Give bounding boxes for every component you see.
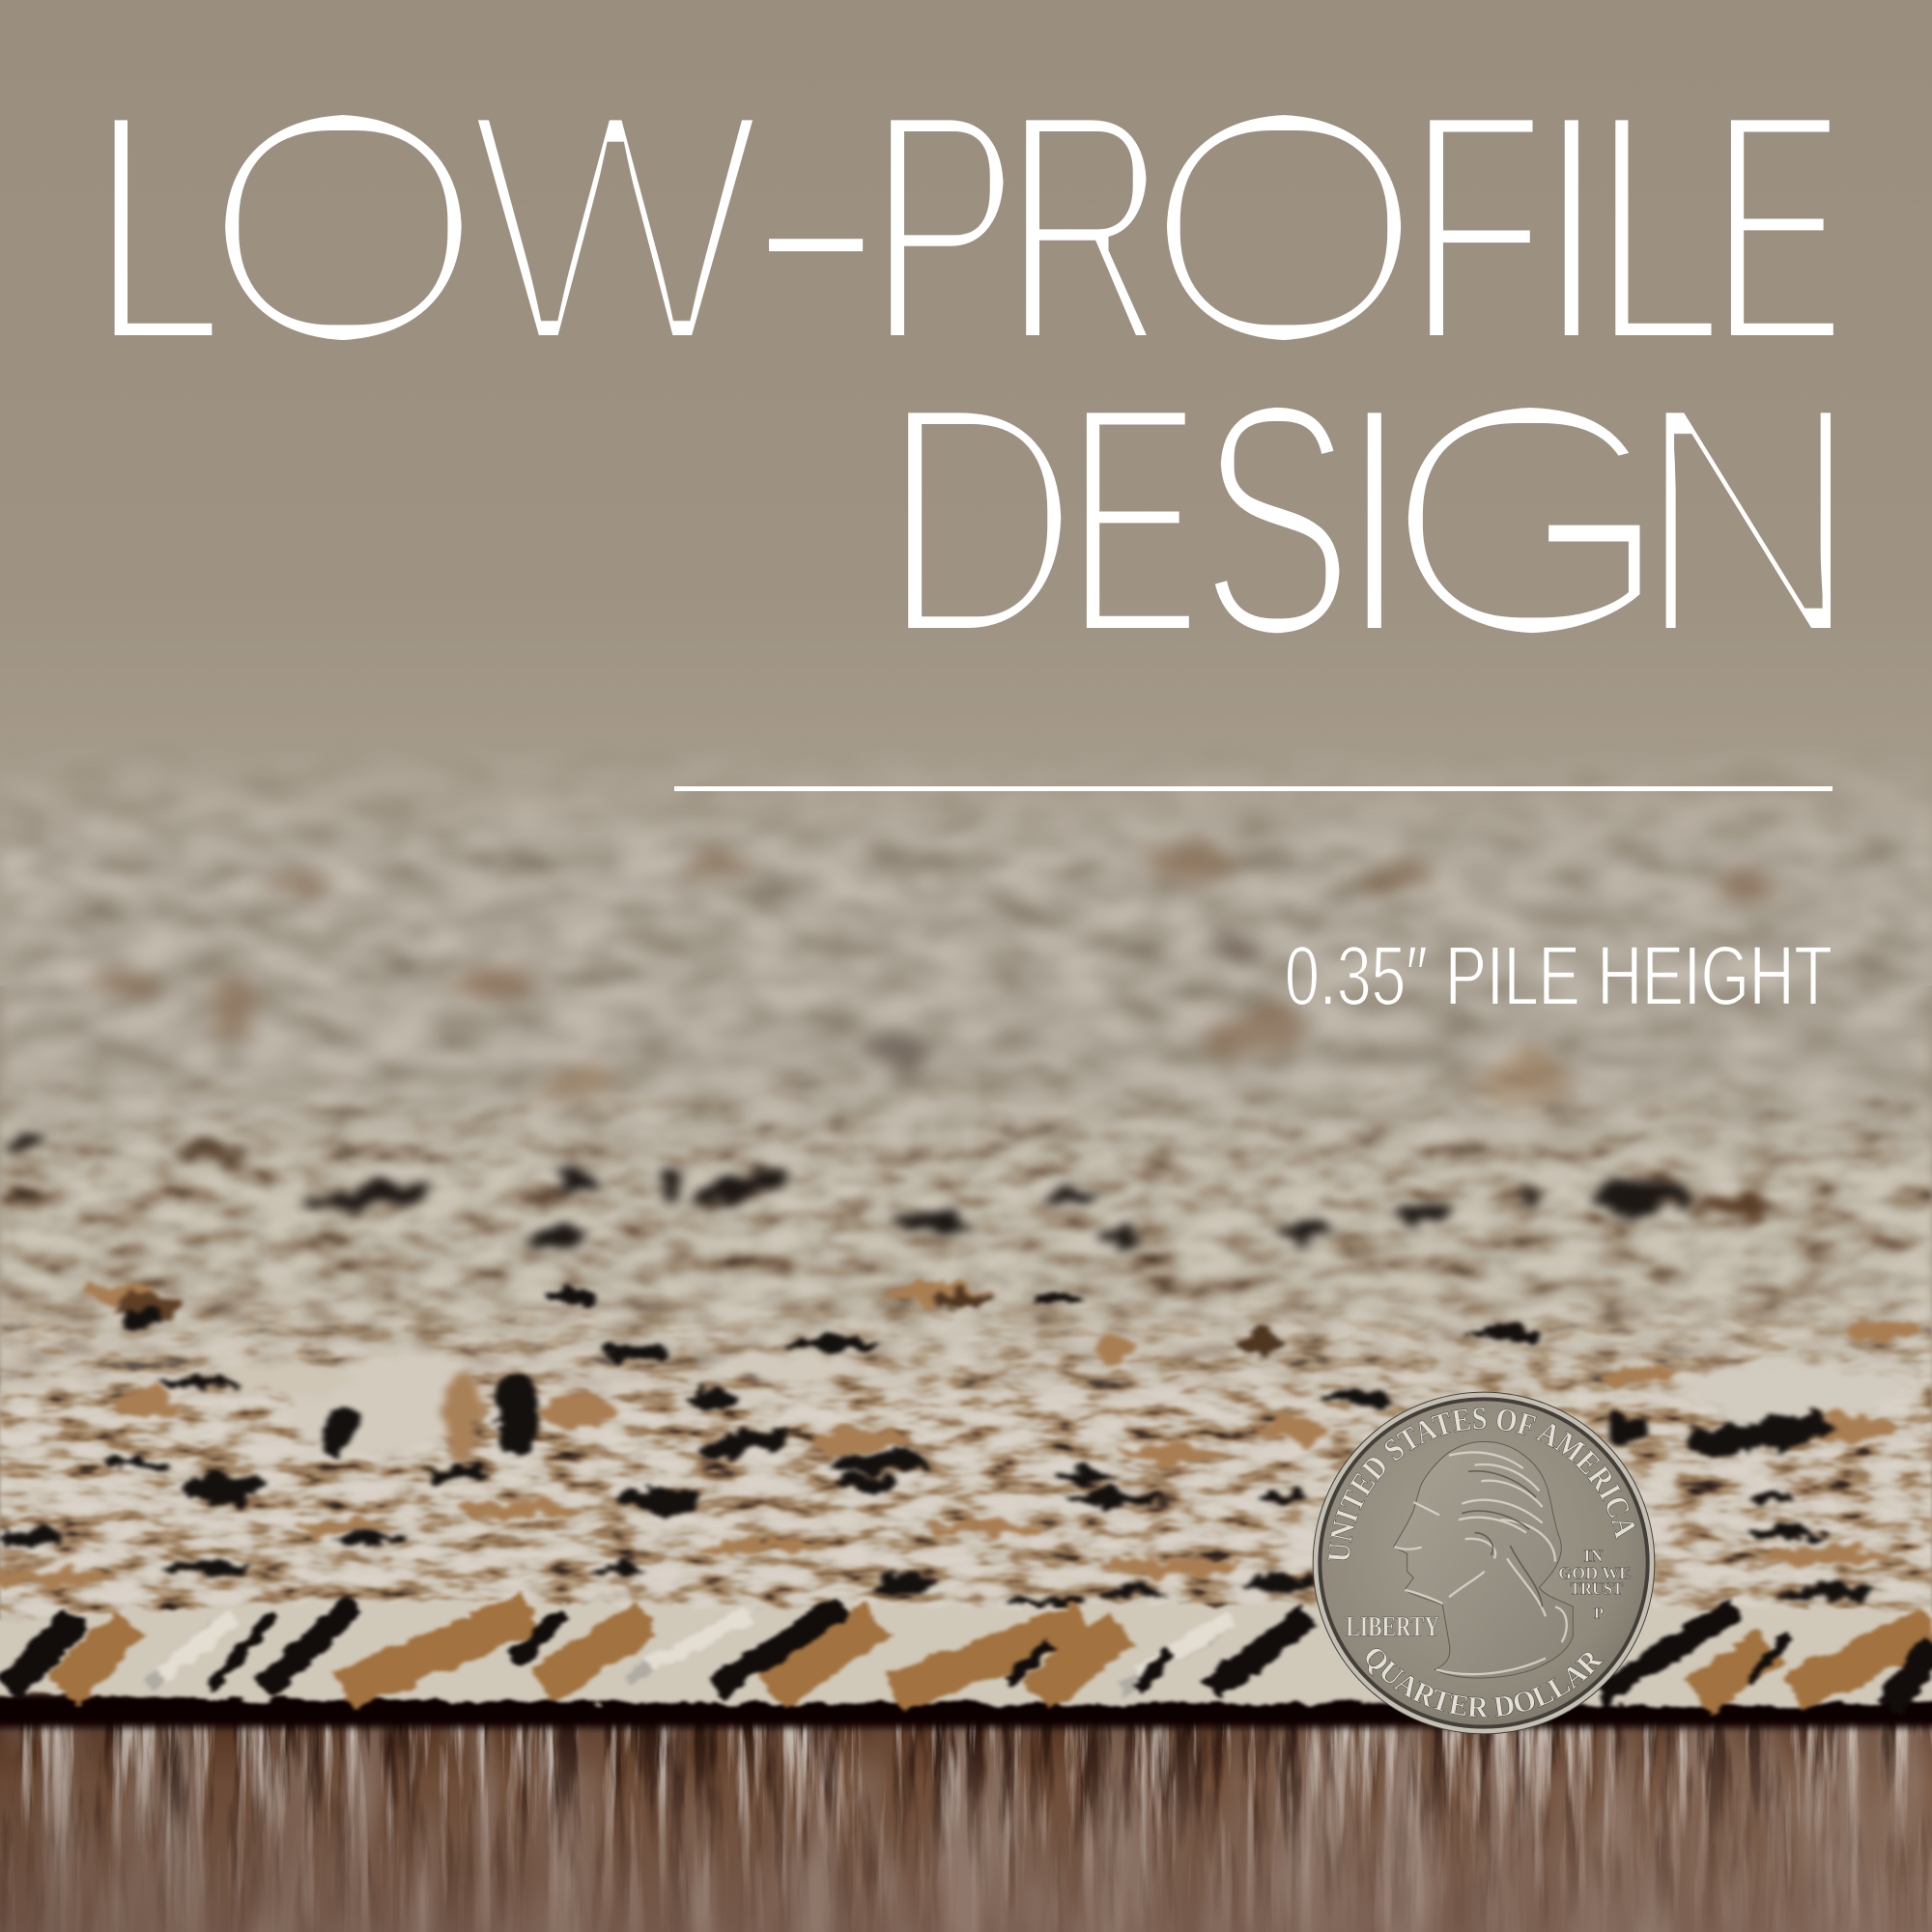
- rug: middle dark flecks: [13, 1131, 1786, 1251]
- title line 2: G: [1378, 334, 1680, 705]
- rug: shadow under braided edge: [0, 1693, 1932, 1727]
- pile height caption: 0.35″ PILE HEIGHT: [1285, 929, 1833, 1023]
- rug: near texture: [0, 1282, 1932, 1700]
- title line 1: P: [868, 42, 1019, 412]
- title line 1: L: [1591, 42, 1724, 412]
- floor: wood planks: [0, 1719, 1932, 1932]
- coin lettering: LIBERTY: [1346, 1611, 1439, 1642]
- title line 1: O: [1138, 42, 1430, 412]
- title line 1: E: [1712, 42, 1845, 412]
- quarter dollar coin: [1312, 1391, 1656, 1735]
- rug: near dark flecks: [0, 1289, 1873, 1608]
- title: low-profile design: [90, 33, 1865, 705]
- heading rule: [674, 786, 1833, 791]
- title line 2: I: [1328, 334, 1421, 705]
- rug: middle texture: [0, 1060, 1932, 1479]
- Washington bust: [1394, 1441, 1573, 1678]
- title line 2: [879, 334, 1865, 705]
- coin lettering: TRUST: [1570, 1579, 1623, 1599]
- coin lettering: GOD WE: [1558, 1563, 1631, 1582]
- title line 2: D: [879, 334, 1081, 705]
- title line 1: O: [196, 42, 491, 412]
- title line 1: I: [1525, 42, 1618, 412]
- title line 1: -: [751, 33, 881, 404]
- rug: far brown flecks: [89, 845, 1776, 1150]
- title line 2: N: [1631, 334, 1865, 705]
- title line 1: L: [90, 42, 225, 412]
- title line 1: F: [1407, 42, 1546, 412]
- coin lettering: P: [1594, 1605, 1604, 1622]
- title line 1: W: [465, 42, 766, 412]
- title line 1: R: [1004, 42, 1167, 412]
- title line 2: E: [1067, 334, 1201, 705]
- rug: braided edge: [0, 1601, 1932, 1708]
- rug: far blurred texture: [0, 775, 1932, 1279]
- title line 2: S: [1199, 334, 1354, 705]
- coin lettering: [1327, 1406, 1635, 1718]
- coin lettering: UNITED STATES OF AMERICA: [1327, 1406, 1635, 1561]
- title line 1: [90, 33, 1845, 412]
- coin rim: [1313, 1392, 1655, 1734]
- wall backdrop: [0, 0, 1932, 985]
- coin lettering: QUARTER DOLLAR: [1366, 1648, 1604, 1718]
- rug: near tan flecks: [0, 1284, 1922, 1584]
- rug: cream knot: [234, 1341, 1904, 1468]
- coin lettering: IN: [1583, 1547, 1603, 1566]
